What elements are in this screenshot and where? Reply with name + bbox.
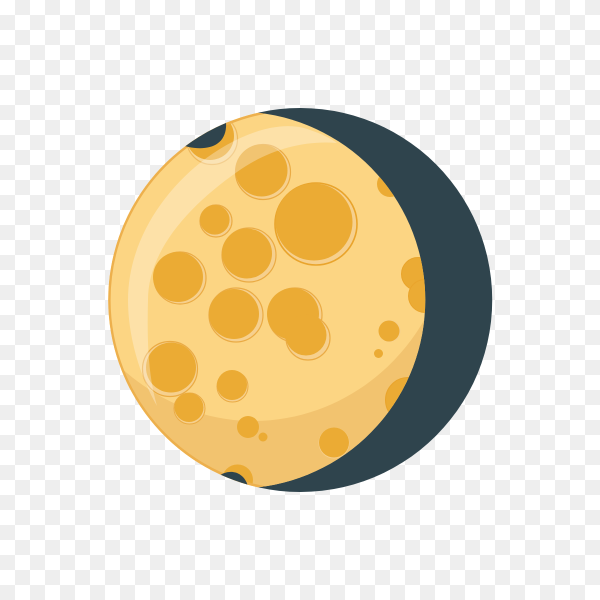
crater: small upper left bbox=[200, 205, 232, 237]
light reflection band bbox=[128, 126, 337, 406]
crater: centre upper bbox=[222, 228, 276, 282]
bottom crater dark shadow bbox=[220, 472, 248, 484]
crater: bottom left small bbox=[174, 393, 205, 424]
crater: lower right in shade bbox=[318, 428, 350, 458]
crater: centre small bbox=[217, 370, 248, 402]
crater: lower left bbox=[142, 342, 198, 396]
lit moon surface bbox=[108, 112, 426, 488]
crater: tiny pair at bottom bbox=[237, 416, 268, 442]
lower shaded area bbox=[120, 320, 424, 488]
crater: clipped upper right bbox=[377, 176, 394, 197]
crater: bottom basin bbox=[222, 464, 253, 486]
top crater dark shadow bbox=[185, 123, 226, 148]
crater: centre bbox=[209, 288, 263, 342]
crater: overlapping pair bbox=[267, 288, 330, 360]
dark moon shadow crescent bbox=[258, 108, 492, 492]
crater: upper middle bbox=[236, 144, 290, 200]
crater: largest bbox=[275, 183, 357, 265]
crater: right small with dot bbox=[374, 320, 400, 358]
orange moon rim bbox=[108, 112, 266, 488]
crater: top rim and basin bbox=[187, 121, 238, 165]
crater: clipped lower right bbox=[385, 377, 409, 412]
crater: left bbox=[153, 252, 206, 304]
crater: clipped right pair bbox=[401, 257, 426, 313]
